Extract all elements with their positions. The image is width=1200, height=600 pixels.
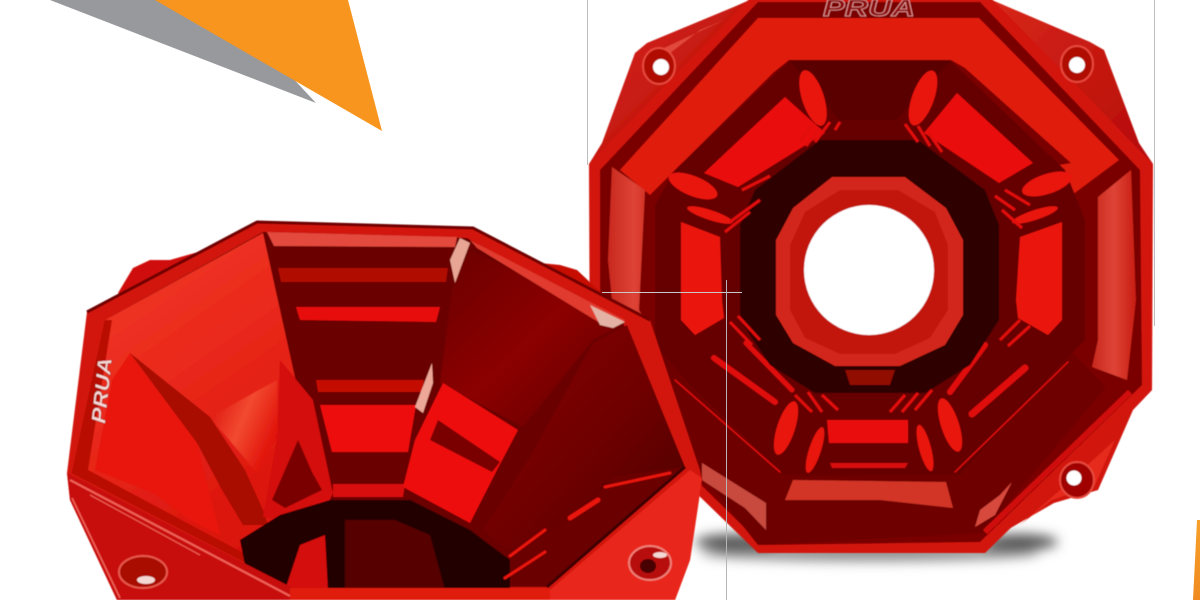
accent: orange triangle: [155, 0, 382, 131]
left horn dark edge: [87, 222, 650, 320]
far right face: [483, 325, 685, 550]
accent: grey triangle: [50, 0, 316, 103]
window reflection: [210, 380, 277, 473]
lower light band: [785, 480, 953, 508]
upper-left bright panel: [704, 97, 825, 187]
bright lower panel: [403, 383, 518, 523]
mounting hole: top left: [643, 48, 675, 84]
left horn, angled view: [67, 222, 702, 600]
left horn flange bump left: [118, 250, 205, 300]
drop shadow under right horn: [695, 534, 1058, 561]
left bright panel: [681, 222, 724, 335]
guide line: left of right horn: [586, 0, 588, 165]
left horn outer silhouette: [67, 222, 702, 600]
lower right outer band: [985, 392, 1130, 532]
left horn flange bump right: [530, 262, 610, 300]
lower lip streaks: [505, 473, 670, 578]
lower-left stripes: [675, 343, 792, 472]
panel fins: [665, 67, 1075, 475]
highlight: strip end: [590, 305, 625, 328]
central hole: [804, 205, 934, 335]
throat black blob: [240, 500, 510, 590]
dark smear: [272, 440, 322, 508]
flange ears: [589, 0, 1153, 553]
lower-right stripes: [950, 345, 1068, 472]
highlight: top corner: [450, 238, 470, 283]
lower rim highlights: [70, 480, 290, 598]
hub inner shade: [790, 190, 948, 354]
embossed PRUA logo, rotated: PRUA: [88, 357, 117, 425]
dark throat ring: [740, 140, 999, 393]
left side panel: [608, 167, 660, 345]
inner hub field: [655, 60, 1085, 475]
mounting hole: lower right: [629, 546, 671, 580]
fringed hub marks: [725, 122, 1030, 412]
bottom bright panel: [827, 420, 908, 443]
right bright panel: [1016, 222, 1062, 335]
bottom rim band: [290, 588, 550, 600]
mounting hole: lower left: [119, 556, 167, 588]
guide line: horizontal crosshair: [602, 292, 742, 294]
opening field: [72, 232, 685, 587]
right side panel: [1092, 170, 1136, 380]
bottom stripe: [830, 463, 908, 468]
lower-right highlight: [975, 482, 1012, 527]
dark octagon rim: [600, 2, 1142, 545]
throat red reflections: [285, 520, 445, 590]
dark wing stripe: [130, 353, 268, 525]
lower left rim: [67, 473, 380, 600]
face A: large left face: [80, 233, 333, 585]
top dark panel: [789, 60, 951, 120]
mounting hole: top right: [1061, 46, 1093, 82]
hub bottom accents: [845, 370, 895, 385]
right lip dark edge: [547, 467, 685, 587]
lower-left highlight: [702, 463, 766, 530]
highlight: top-right strip: [470, 240, 625, 328]
right back face: [440, 250, 625, 427]
highlight: centre blade: [415, 363, 433, 413]
main octagon body: [589, 0, 1153, 553]
upper bright face: [620, 18, 1119, 195]
back face base: [267, 232, 453, 493]
upper-right bright panel: [924, 93, 1033, 183]
hub lighter octagon: [776, 177, 963, 366]
dark band on bright panel: [430, 420, 500, 472]
guide line: right of right horn: [1154, 0, 1156, 326]
wing: [95, 353, 220, 535]
guide line: vertical crosshair: [726, 280, 728, 600]
accent: orange sliver at right edge: [1193, 520, 1200, 600]
lower right rim: [520, 470, 702, 600]
lower dark face: [650, 330, 1106, 545]
face A shadow edge: [72, 320, 293, 587]
red strip beside window: [263, 360, 333, 520]
back face bands: [267, 232, 457, 497]
right horn, front view: [589, 0, 1153, 553]
mounting hole: bottom right: [1060, 462, 1094, 498]
